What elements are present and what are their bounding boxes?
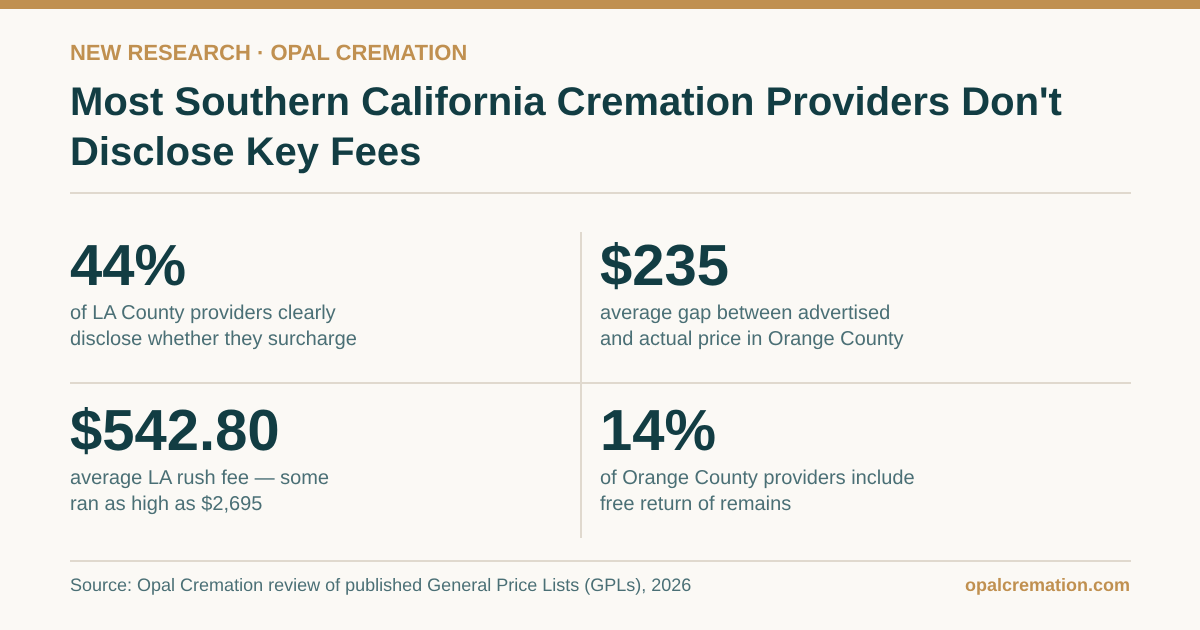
title: Most Southern California Cremation Providers Don't (70, 80, 1062, 124)
stat: 44% (70, 233, 357, 350)
stat description (70, 302, 357, 350)
stat: $235 (600, 233, 904, 350)
eyebrow: NEW RESEARCH · OPAL CREMATION (70, 40, 467, 65)
source note: Source: Opal Cremation review of published General Price Lists (GPLs), 2026 (70, 575, 691, 595)
stat description: disclose whether they surcharge (70, 328, 357, 350)
stat value: 44% (70, 233, 186, 298)
title (70, 80, 1062, 174)
stat: $542.80 (70, 398, 329, 515)
stat value: $542.80 (70, 398, 280, 463)
stat description: average gap between advertised (600, 302, 890, 324)
website: opalcremation.com (965, 575, 1130, 595)
stat description: average LA rush fee — some (70, 467, 329, 489)
stat description (600, 467, 915, 515)
title: Disclose Key Fees (70, 130, 421, 174)
stat description: of LA County providers clearly (70, 302, 336, 324)
stat description: and actual price in Orange County (600, 328, 904, 350)
stat value: $235 (600, 233, 729, 298)
stat description: free return of remains (600, 493, 791, 515)
stat value: 14% (600, 398, 716, 463)
stat description: ran as high as $2,695 (70, 493, 262, 515)
stat description: of Orange County providers include (600, 467, 915, 489)
top accent bar (0, 0, 1200, 9)
stat description (70, 467, 329, 515)
stat description (600, 302, 904, 350)
stat: 14% (600, 398, 915, 515)
